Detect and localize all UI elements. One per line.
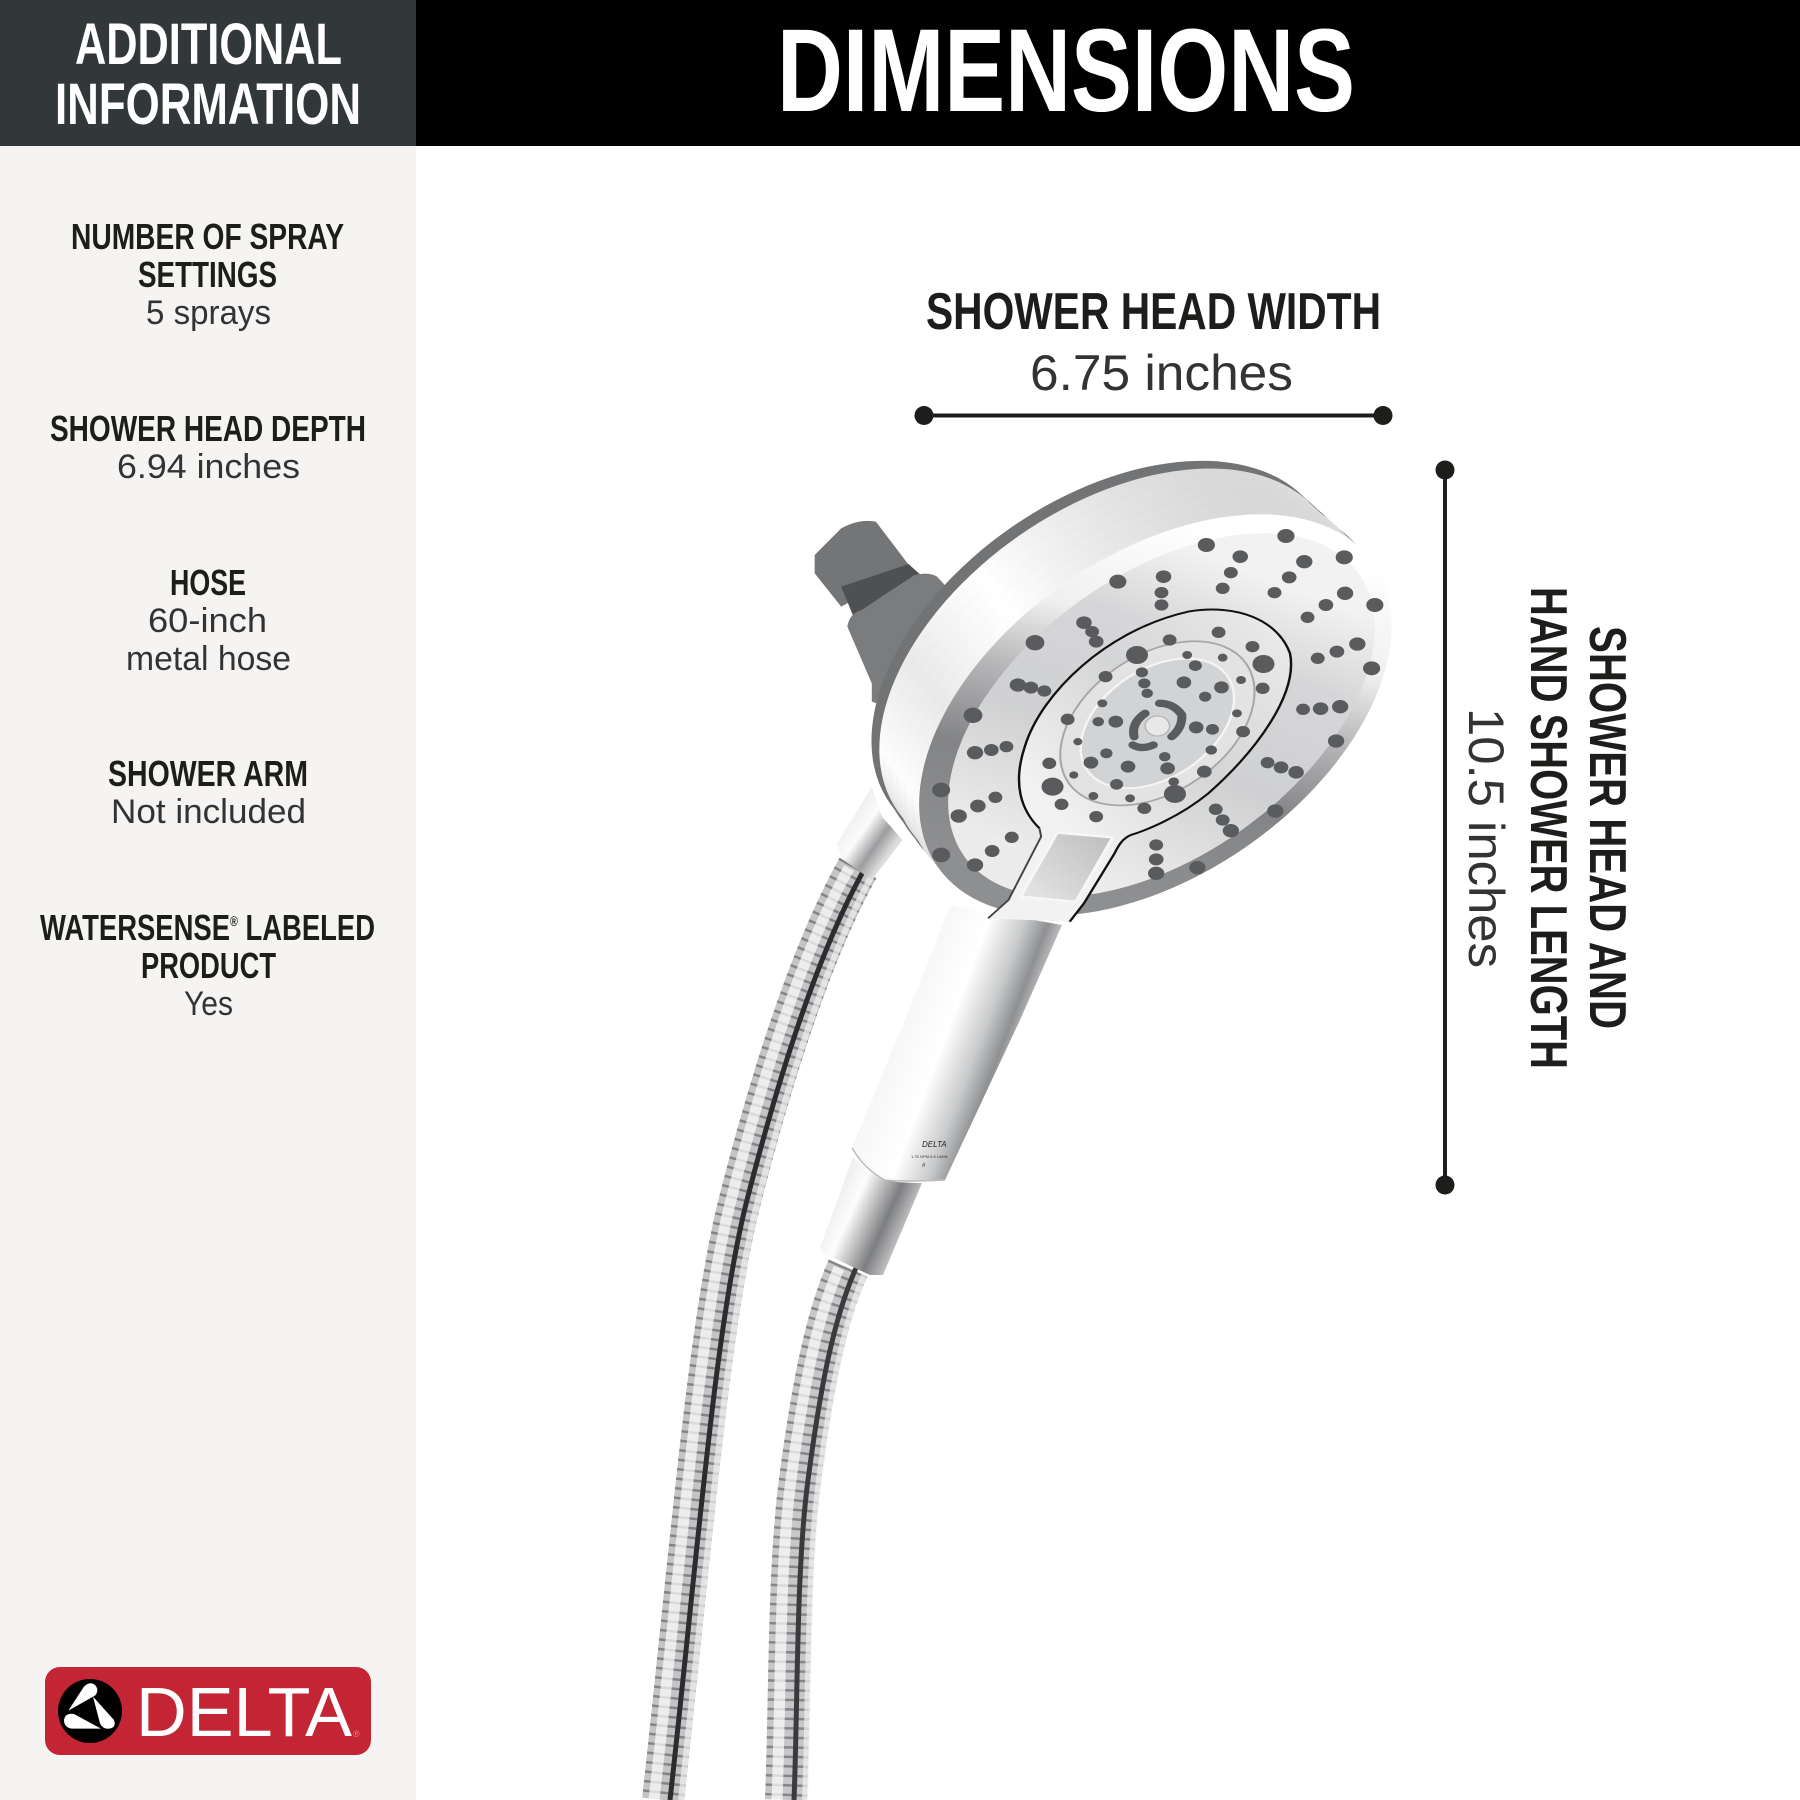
- arrow: length dimension line: [1436, 460, 1454, 1194]
- dimension label: shower head width: 6.75 inches: [1030, 345, 1293, 401]
- head back shell: [781, 389, 1472, 976]
- illustration: hand shower handle: #: [922, 1163, 926, 1169]
- spec: shower head depth: [50, 408, 366, 486]
- spec: shower arm: SHOWER ARM: [108, 753, 308, 794]
- spec: watersense labeled product: [40, 907, 375, 1023]
- spec: number of spray settings: 5 sprays: [146, 294, 271, 332]
- center nozzle: [1133, 703, 1182, 747]
- panel heading: additional information: [0, 0, 416, 146]
- spray nozzles: [932, 529, 1383, 880]
- illustration: hand shower handle: DELTA: [922, 1140, 947, 1149]
- hose ferrule: [837, 787, 902, 880]
- logo: delta: DELTA: [136, 1673, 352, 1751]
- panel heading: additional information: INFORMATION: [55, 72, 361, 137]
- spec: number of spray settings: NUMBER OF SPRAY: [71, 216, 344, 257]
- spec: hose: 60-inch: [148, 602, 267, 640]
- spec: shower head depth: 6.94 inches: [117, 448, 300, 486]
- dimension label: shower head and hand shower length: [1458, 587, 1636, 1069]
- dimension label: shower head and hand shower length: HAND SHOWER LENGTH: [1519, 587, 1577, 1069]
- spec: watersense labeled product: Yes: [184, 985, 233, 1023]
- panel heading: additional information: ADDITIONAL: [75, 12, 342, 77]
- title: dimensions: DIMENSIONS: [777, 5, 1355, 137]
- dimension label: shower head width: SHOWER HEAD WIDTH: [926, 283, 1381, 341]
- shower arm mount: [815, 521, 962, 707]
- spec: watersense labeled product: LABELED: [238, 907, 375, 948]
- spec: shower head depth: SHOWER HEAD DEPTH: [50, 408, 366, 449]
- spec: watersense labeled product: WATERSENSE: [40, 907, 289, 948]
- spec: watersense labeled product: PRODUCT: [141, 945, 276, 986]
- spec: watersense labeled product: ®: [230, 913, 238, 929]
- dimension label: shower head and hand shower length: SHOWER HEAD AND: [1578, 626, 1636, 1029]
- spec: hose: metal hose: [126, 640, 291, 678]
- spec: shower arm: [108, 753, 308, 831]
- illustration: metal hose to shower arm mount: [654, 868, 876, 1800]
- spray button: [1021, 833, 1113, 902]
- spec: number of spray settings: SETTINGS: [138, 254, 277, 295]
- illustration: shower head: [781, 389, 1483, 989]
- spec: hose: HOSE: [170, 562, 246, 603]
- dimension label: shower head and hand shower length: 10.5 inches: [1458, 708, 1514, 968]
- logo: delta: ®: [353, 1729, 360, 1739]
- spec: hose: [126, 562, 291, 678]
- groove outline: [1019, 610, 1291, 922]
- header band: dimensions: [416, 0, 1800, 146]
- illustration: metal hose to hand shower: [777, 1268, 867, 1800]
- spec: shower arm: Not included: [111, 793, 306, 831]
- panel: sidebar background: [0, 146, 416, 1800]
- head chrome sidewall: [790, 397, 1476, 981]
- face ring: [827, 441, 1483, 989]
- inner ring detail: [1022, 611, 1293, 836]
- arrow: width dimension line: [914, 406, 1392, 425]
- face plate: [867, 469, 1456, 961]
- logo: delta: [45, 1667, 371, 1755]
- illustration: hand shower handle: [820, 905, 1062, 1275]
- inner spray plate: [988, 610, 1291, 922]
- dimension label: shower head width: [926, 283, 1381, 401]
- illustration: hand shower handle: 1.75 GPM 6.6 L/MIN: [911, 1154, 948, 1159]
- spec: number of spray settings: [71, 216, 344, 332]
